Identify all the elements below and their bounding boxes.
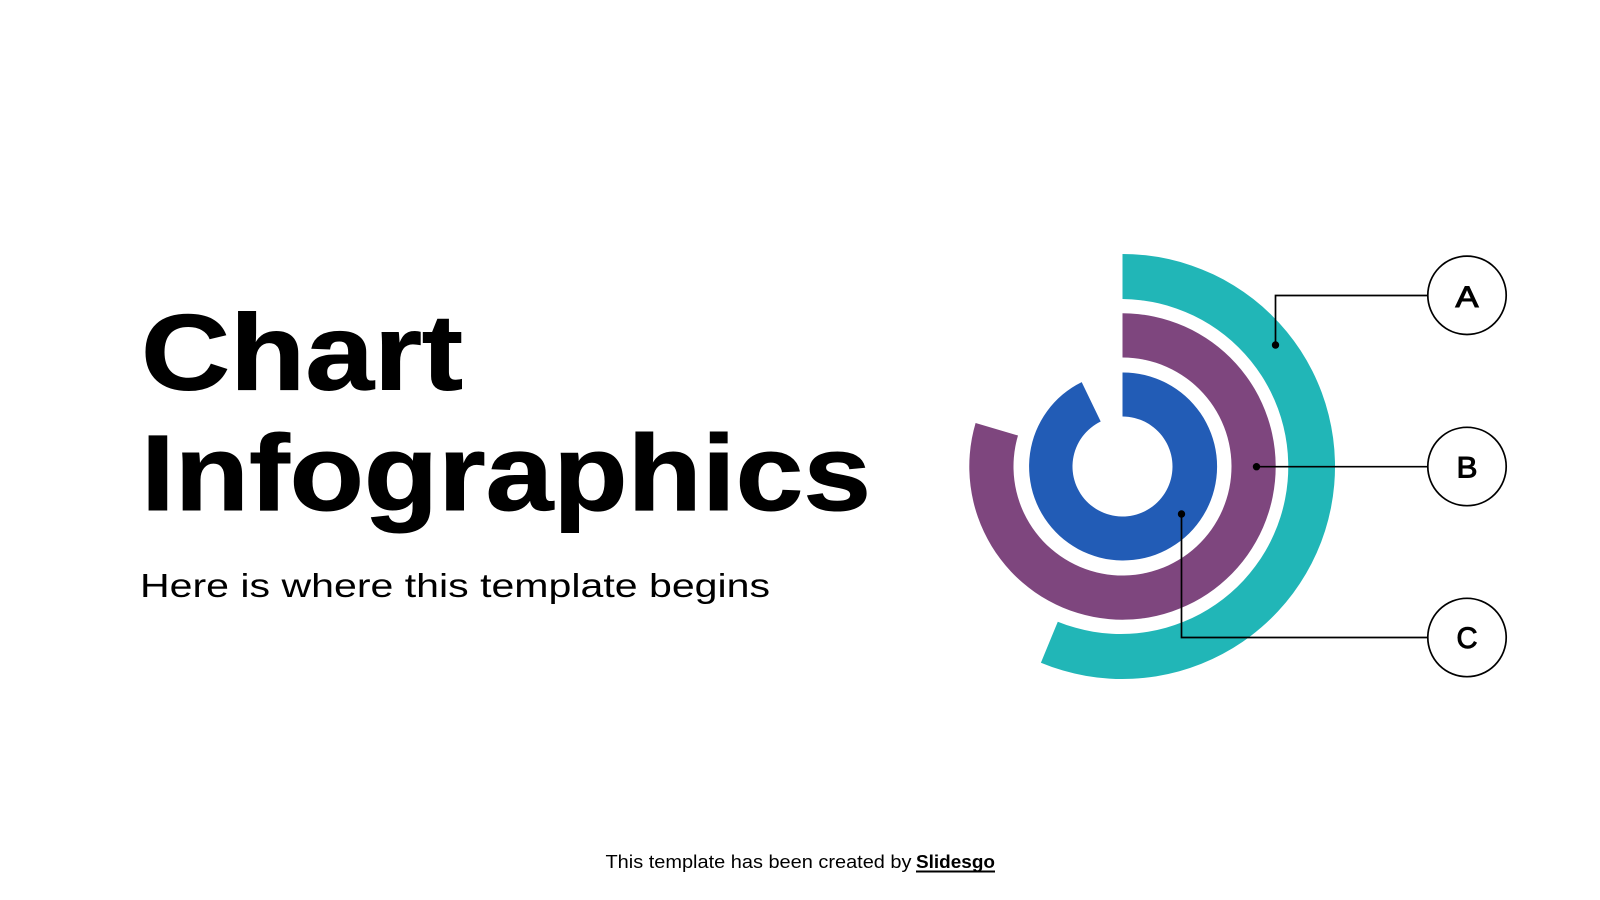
title xyxy=(141,292,871,533)
connector B xyxy=(1253,463,1428,470)
radial bar chart xyxy=(969,254,1335,679)
label circle A xyxy=(1428,256,1506,334)
label circle B xyxy=(1428,427,1506,506)
ring A: teal xyxy=(1041,254,1335,679)
footer credit: Slidesgo xyxy=(916,851,995,872)
title: Infographics xyxy=(141,412,871,533)
connector C xyxy=(1178,510,1428,638)
label circle B: B xyxy=(1456,452,1478,484)
title: Chart xyxy=(141,292,463,412)
ring C: blue xyxy=(1029,372,1217,560)
subtitle: Here is where this template begins xyxy=(140,567,770,604)
ring B: purple xyxy=(969,313,1276,620)
connector A xyxy=(1272,296,1428,349)
label circle C xyxy=(1428,598,1506,677)
label circle C: C xyxy=(1456,622,1478,655)
footer credit: This template has been created by xyxy=(606,851,912,872)
label circle A: A xyxy=(1456,281,1478,314)
